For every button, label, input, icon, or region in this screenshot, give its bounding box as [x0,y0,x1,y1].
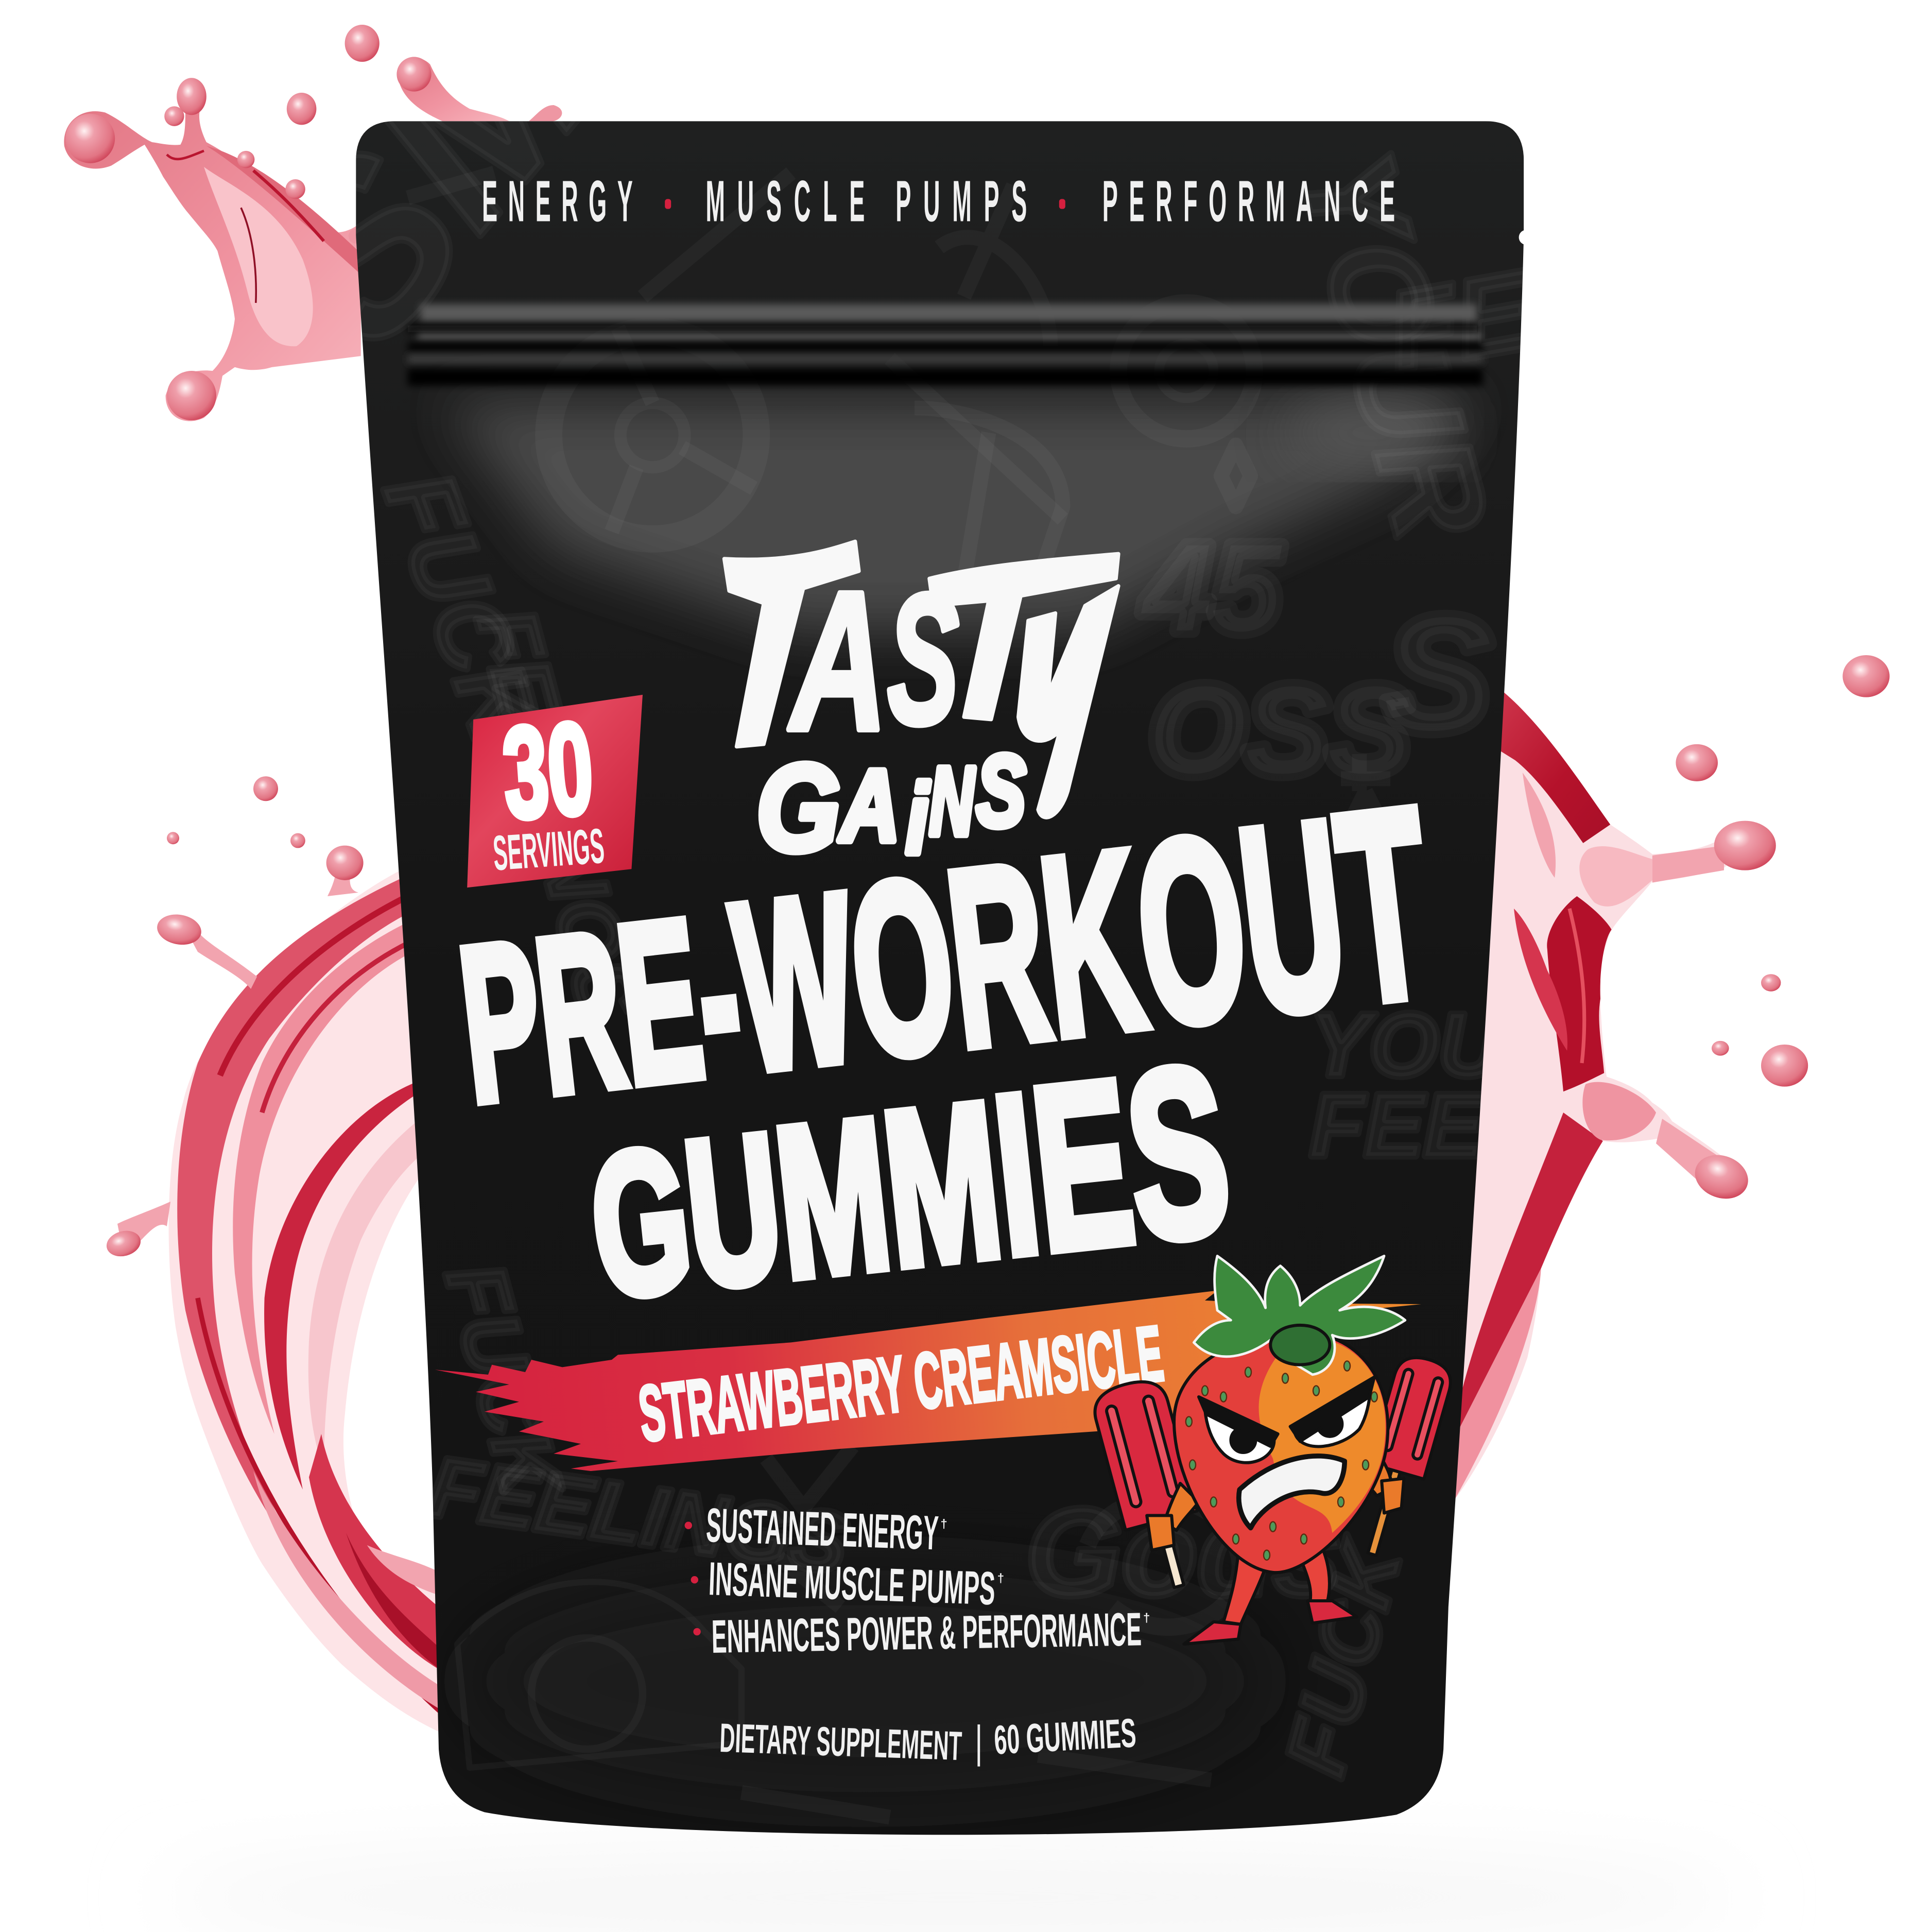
text: ENHANCES POWER & PERFORMANCE [711,1603,1142,1663]
pouch pattern: FUCK [427,1254,580,1509]
ground shadow [161,1848,1743,1932]
right popsicle [1346,1352,1456,1562]
flavor banner: STRAWBERRY CREAMSICLE [634,1309,1167,1458]
pouch pattern: YOUR [1270,135,1518,554]
brand logo: S [976,734,1026,847]
pouch pattern: FEELINGS [458,599,658,1029]
tagline [482,169,1395,234]
heading: GUMMIES: GUMMIES [578,1016,1240,1347]
benefit list: † [1143,1611,1150,1625]
left pupil [1231,1428,1255,1452]
brand logo: N [929,747,975,855]
footer label: 60 GUMMIES [993,1709,1137,1763]
flavor banner [435,1291,1421,1471]
badge number: 30 [498,695,597,846]
left eye [1205,1409,1274,1463]
pouch pattern: OSS [1149,661,1410,799]
pouch pattern: FUCK [1267,1530,1420,1785]
splash: top left [64,25,562,421]
right eye [1295,1390,1371,1446]
splash: left swirl [104,776,447,1736]
tagline: MUSCLE PUMPS [705,169,1027,234]
zipper [408,304,1483,386]
benefit list: SUSTAINED ENERGY [705,1498,939,1560]
brand logo: S [887,556,959,763]
brand logo: G [756,739,840,877]
servings badge: SERVINGS [491,818,606,881]
tear notches [1519,230,1533,245]
tagline: ENERGY [482,169,633,234]
benefit 2: INSANE MUSCLE PUMPS [708,1552,996,1615]
footer label: DIETARY SUPPLEMENT [719,1715,962,1769]
shoes [1184,1601,1357,1644]
pouch pattern: YOUR [1310,995,1567,1095]
benefit list [685,1498,1150,1663]
brand logo [724,541,1118,877]
pouch pattern: FEELINGS [424,1439,853,1591]
pouch pattern [356,122,1524,1824]
brows [1199,1377,1374,1446]
splash: right swirl [1446,655,1890,1511]
heading: PRE-WORKOUT: PRE-WORKOUT [445,750,1444,1158]
right pupil [1317,1412,1342,1437]
pouch pattern: FEEL [1379,222,1681,394]
tagline: PERFORMANCE [1102,169,1395,234]
benefit list: † [997,1571,1004,1585]
brand logo: A [838,749,900,862]
benefit list: † [940,1517,947,1531]
left popsicle [1089,1375,1215,1596]
pouch pattern: Gods [1026,1483,1341,1621]
servings badge [467,695,643,887]
pouch pattern: S [1384,585,1492,764]
pouch pattern: FEEL [1310,1075,1538,1175]
seeds [1186,1361,1377,1560]
brand logo: A [787,551,887,772]
hands [1147,1478,1404,1550]
pouch [356,121,1524,1835]
mouth [1239,1456,1344,1528]
calyx [1270,1325,1330,1365]
body [1174,1333,1388,1572]
brand logo: i [906,763,929,874]
mascot: angry strawberry [1089,1256,1456,1644]
leaves [1194,1256,1405,1375]
legs [1223,1543,1330,1625]
orange face [1259,1338,1386,1533]
arms [1164,1459,1391,1530]
pouch pattern: 45 [1141,519,1282,657]
pouch pattern: FUCK [363,458,563,760]
